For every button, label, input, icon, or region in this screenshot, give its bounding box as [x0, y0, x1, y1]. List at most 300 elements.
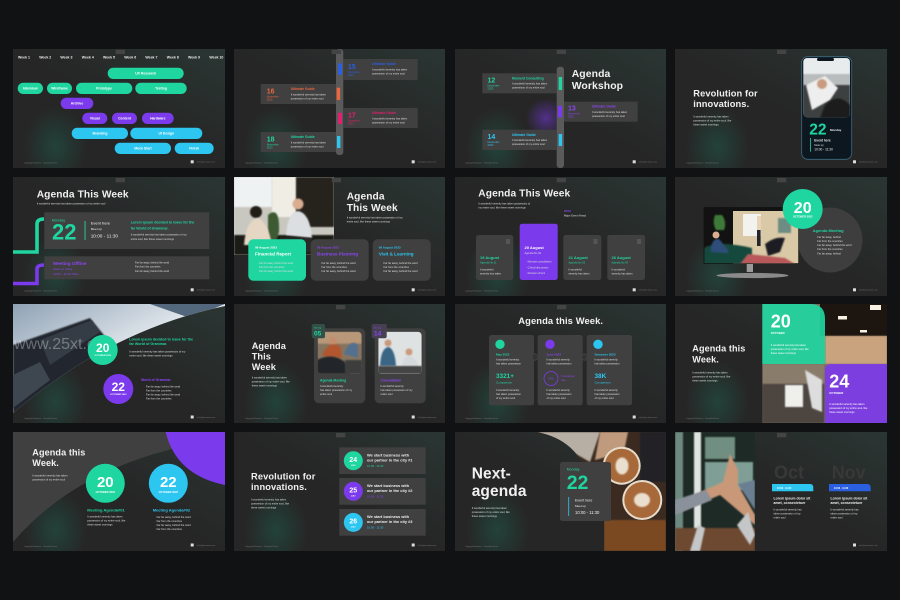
event text top: It wonderful serenity has taken possession of my — [129, 350, 186, 354]
event card meeting: Meet up today — [53, 267, 73, 271]
photo: coffee cups — [537, 432, 666, 551]
panel: revolution phone slide: info@yourname.com — [859, 162, 878, 164]
workshop card 12: November — [488, 84, 500, 88]
date circle — [783, 189, 823, 229]
gantt pills: Mock Start — [134, 147, 153, 151]
card: 21 august: serenity has taken — [568, 272, 590, 276]
photo: office meeting — [234, 177, 334, 255]
event card: 10:00 - 11:30 — [575, 510, 600, 515]
subtitle: It wonderful serenity has taken possession of my entire soul — [37, 202, 106, 206]
panel: vertical timeline slide: Copyright Business · Template Name — [245, 162, 279, 164]
oct text: taken possession of my — [774, 512, 801, 516]
event card — [560, 462, 611, 521]
card: 20 august highlighted — [520, 224, 558, 280]
body text: possession of my entire soul — [32, 478, 65, 482]
gantt pills: Visual — [90, 117, 100, 121]
panel: building photo slide — [13, 304, 225, 423]
oct text: amet, consectetuer — [774, 501, 806, 505]
timeline card 16 — [261, 84, 340, 104]
event card monday — [44, 212, 209, 249]
date block 24: OCTOBER — [829, 391, 843, 395]
panel: agenda this week circles slide: Copyright Business · Template Name — [24, 545, 58, 548]
body text: possession of my entire soul, like — [692, 374, 731, 378]
timeline card 16: 16 — [267, 88, 275, 96]
card: 21 august: It wonderful — [568, 268, 582, 272]
card 24: We start business with — [367, 452, 410, 458]
subtitle — [478, 201, 530, 209]
date badge 14: Meeting — [374, 326, 381, 330]
card: 21 august — [563, 235, 601, 280]
gantt pills: Archive — [71, 102, 83, 106]
agenda text 01: possession of my entire soul, like — [87, 518, 126, 522]
stat card september: It wonderful serenity — [594, 388, 618, 392]
agenda text 01 — [87, 508, 126, 526]
panel: next agenda coffee slide — [455, 432, 666, 551]
workshop card 13: 13 — [568, 106, 576, 112]
card: financial report: 08 August 2023 — [255, 246, 277, 250]
stat card may: has taken possession — [496, 362, 522, 366]
workshop card 13: possession of my entire soul — [592, 114, 625, 118]
body text — [251, 498, 290, 510]
event card meeting: Far far away, behind the word — [135, 260, 170, 264]
timeline card 17: Ultimate Guide — [372, 111, 396, 115]
stat card june: 65% — [548, 376, 554, 380]
workshop card 14: Ultimate Guide — [512, 133, 536, 137]
timeline card 15: November — [348, 70, 360, 74]
body text: these sweet mornings. — [693, 122, 720, 126]
heading: Agenda — [252, 341, 287, 351]
body text — [693, 114, 732, 126]
week header row: Week 8 — [167, 56, 179, 60]
agenda text 02 — [153, 508, 191, 531]
time bar blue — [829, 484, 871, 491]
agenda meeting list: Far from the countries — [817, 239, 843, 243]
card: visit and learning: Far far away, behind the word — [384, 261, 418, 265]
card: business planning: Far far away, behind the word — [322, 261, 356, 265]
week header row: Week 1 — [18, 56, 30, 60]
panel: building photo slide: info@yourname.com — [197, 417, 216, 419]
oct text: Lorem ipsum dolor sit — [774, 496, 811, 500]
time bar blue: 10:00 - 11:30 — [834, 487, 849, 490]
body text: It wonderful serenity has taken — [692, 370, 728, 374]
timeline card 17 — [338, 108, 418, 128]
date circle 20: OCTOBER 2023 — [95, 355, 112, 357]
stat card june: June 2023 — [546, 352, 561, 356]
body text: these sweet mornings — [692, 378, 718, 382]
card: consultation: entire soul — [380, 392, 393, 396]
heading — [32, 448, 85, 468]
panel: agenda this week photo cards slide: info@yourname.com — [418, 290, 437, 292]
stat card june: It wonderful serenity — [546, 358, 570, 362]
card 25: JULY — [351, 496, 356, 498]
date circle 20 — [88, 335, 118, 365]
card: consultation: Consultation — [380, 378, 401, 382]
card: 19 august: Agenda No 01 — [480, 260, 497, 264]
card 26: JULY — [351, 527, 356, 529]
agenda text 01: Meeting Agenda#01 — [87, 508, 125, 513]
stat card june — [538, 335, 583, 405]
agenda text 02: Meeting Agenda#02 — [153, 508, 191, 513]
stat card may — [489, 335, 534, 405]
heading: agenda — [472, 483, 527, 500]
body text — [252, 376, 290, 388]
event text bottom — [141, 378, 181, 400]
body text: possession of my entire soul, like — [252, 380, 290, 384]
heading: This Week — [347, 203, 398, 214]
date circle 22 — [149, 464, 188, 503]
card: agenda meeting — [312, 324, 365, 403]
heading: Agenda — [347, 191, 385, 202]
card: 26 august: 26 August — [612, 255, 631, 260]
oct text: entire soul — [774, 516, 786, 520]
event card monday: Lorem ipsum decided to leave for the — [131, 220, 194, 224]
event card monday: far World of Grammar. — [131, 226, 169, 230]
panel: agenda this week column cards slide: info@yourname.com — [639, 290, 658, 292]
agenda text 02: · Far from the countries — [155, 519, 183, 523]
gantt pills: Wireframe — [51, 87, 68, 91]
stat card june: of my entire soul — [546, 396, 566, 400]
date block 20: possession of my entire soul, like — [771, 347, 809, 351]
phone mockup: 10:00 - 11:30 — [814, 148, 833, 152]
card: 20 august highlighted: · Moment consultation — [526, 260, 552, 264]
date circle 22: 22 — [160, 474, 177, 491]
phone mockup: Monday — [830, 128, 842, 132]
event card meeting: Far from the countries — [135, 265, 161, 269]
agenda meeting list: Far far away, behind the word — [817, 243, 852, 247]
gantt pills: Content — [118, 117, 132, 121]
oct text — [774, 496, 811, 520]
card 24 — [339, 447, 426, 474]
card: financial report: Far far away, behind the word — [259, 261, 294, 265]
heading: Next- — [472, 466, 511, 482]
panel: agenda this week two photo cards slide: info@yourname.com — [418, 417, 437, 419]
body text — [472, 506, 510, 518]
panel: agenda this week column cards slide: Copyright Business · Template Name — [465, 290, 499, 292]
panel: revolution three cards slide — [234, 432, 445, 551]
stat card june: has taken possession — [546, 362, 572, 366]
stat card may: 3321+ — [496, 373, 514, 380]
time bar cyan — [772, 484, 813, 491]
event text bottom: World of Grammar — [141, 378, 171, 382]
date circle 20: 20 — [96, 341, 110, 355]
timeline card 16: It wonderful serenity has taken — [291, 92, 326, 96]
workshop card 12: 12 — [488, 78, 495, 84]
heading: Revolution for — [251, 472, 316, 482]
workshop card 12: Moment Consulting — [512, 76, 544, 80]
card: 19 august — [476, 235, 513, 280]
event card meeting — [44, 256, 209, 279]
body text: It wonderful serenity has taken — [251, 498, 287, 502]
card: agenda meeting: Agenda Meeting — [320, 378, 346, 382]
card 26: 10:00 - 11:30 — [367, 526, 384, 530]
panel: agenda this week schedule slide — [13, 177, 225, 296]
heading: Agenda — [572, 69, 611, 80]
timeline card 15 — [338, 59, 418, 80]
date circle 22 — [103, 374, 133, 404]
agenda meeting list: Far far away, behind — [817, 251, 841, 255]
timeline card 16: possession of my entire soul — [291, 96, 324, 100]
panel: agenda this week column cards slide — [455, 177, 666, 296]
stat card may: has taken possession — [496, 392, 522, 396]
card: visit and learning — [373, 239, 431, 281]
stat card september — [587, 335, 632, 405]
panel: agenda this week statistics slide: info@yourname.com — [639, 417, 658, 419]
phone mockup: Event here — [814, 139, 831, 143]
panel: agenda workshop slide — [455, 49, 666, 168]
connector dot — [532, 354, 538, 360]
photo: skyscraper — [13, 304, 225, 420]
card: agenda meeting: has taken possession of my — [320, 388, 353, 392]
workshop card 13: It wonderful serenity has taken — [592, 110, 628, 114]
card: business planning: Far far away, behind the word — [322, 269, 356, 273]
nov text: taken possession of my — [830, 512, 858, 516]
card: 19 august: 19 August — [480, 255, 500, 260]
heading: Agenda this — [692, 344, 745, 354]
week marker — [564, 209, 586, 218]
stat card september: Semester 2023 — [594, 352, 616, 356]
panel: weekly roadmap slide — [13, 49, 225, 168]
timeline card 15: 15 — [348, 64, 356, 71]
card: agenda meeting: It wonderful serenity — [320, 384, 344, 388]
date circle 22: OCTOBER 2023 — [110, 394, 127, 396]
panel: agenda this week two photo cards slide — [234, 304, 445, 423]
event text top — [129, 338, 193, 358]
teal connector — [13, 219, 44, 252]
timeline spine — [336, 49, 343, 155]
nov text: amet, consectetuer — [830, 501, 863, 505]
date circle: 20 — [794, 200, 812, 217]
panel: oct nov high five slide: info@yourname.com — [859, 545, 878, 547]
time bar cyan: 10:00 - 11:30 — [777, 487, 792, 490]
timeline card 17: November — [348, 118, 360, 122]
agenda text 02: · Far far away, behind the word — [155, 515, 191, 519]
date block 20: It wonderful serenity has taken — [771, 343, 806, 347]
event text top: Lorem ipsum decided to leave for the — [129, 338, 193, 342]
card: visit and learning: Visit & Learning — [379, 252, 414, 256]
card 25: We start business with — [367, 483, 410, 488]
event card monday: It wonderful serenity has taken possession of my — [131, 232, 187, 236]
date badge 05 — [312, 324, 325, 338]
date circle 20: 20 — [97, 474, 114, 491]
stat card june: It wonderful serenity — [546, 388, 570, 392]
card: 20 august highlighted: Agenda No 02 — [524, 251, 542, 255]
event card: Event here — [575, 498, 592, 502]
timeline card 17: It wonderful serenity has taken — [372, 116, 408, 120]
workshop card 12: It wonderful serenity has taken — [512, 82, 548, 86]
gantt pills: Finish — [189, 147, 199, 151]
event text top: far World of Grammar. — [129, 342, 167, 346]
workshop card 12 — [482, 73, 562, 93]
photo: office consultation — [378, 332, 422, 374]
card: 19 august: It wonderful — [480, 268, 494, 272]
card: 21 august: Agenda No 03 — [568, 260, 586, 264]
card: financial report — [248, 239, 306, 281]
heading: innovations. — [251, 482, 307, 492]
card: 19 august: serenity has taken — [480, 272, 502, 276]
panel: vertical timeline slide: info@yourname.com — [418, 162, 437, 164]
card: 21 august: 21 August — [568, 255, 588, 260]
card 24: our partner in the city #1 — [367, 458, 413, 462]
panel: agenda this week statistics slide: Copyright Business · Template Name — [465, 417, 499, 420]
stat card may: of my entire soul — [496, 396, 515, 400]
stat card june: Comparison — [561, 374, 576, 378]
workshop card 12: 2023 — [488, 86, 494, 90]
card 26: 26 — [349, 519, 357, 526]
week header row — [18, 56, 223, 60]
event text bottom: Far far away, behind the word — [146, 392, 181, 396]
week header row: Week 9 — [188, 56, 200, 60]
phone mockup: 22 — [809, 121, 827, 138]
event card monday: entire soul, like these sweet mornings — [131, 237, 175, 241]
month label nov: Nov — [832, 462, 866, 482]
date block 20 — [762, 304, 825, 364]
heading: innovations. — [693, 99, 749, 109]
card: business planning: 09 August 2023 — [317, 246, 339, 250]
stat card may: It wonderful serenity — [496, 358, 520, 362]
date circle: OCTOBER 2023 — [793, 214, 813, 218]
panel: agenda this week office photo slide — [675, 304, 887, 423]
timeline card 18: 18 — [267, 136, 275, 144]
connector dot — [581, 354, 588, 360]
body text — [692, 370, 731, 382]
stat card may: May 2023 — [496, 352, 510, 356]
week header row: Week 6 — [124, 56, 136, 60]
panel: agenda workshop slide: Copyright Business · Template Name — [465, 162, 499, 164]
agenda text 01: these sweet mornings — [87, 522, 113, 526]
gantt pills: UI Design — [158, 132, 174, 136]
heading: Week. — [32, 458, 59, 468]
gantt pills: Prototype — [96, 87, 112, 91]
workshop card 13: November — [568, 112, 580, 116]
week header row: Week 2 — [39, 56, 51, 60]
workshop card 12: possession of my entire soul — [512, 86, 545, 90]
date circle 20: OCTOBER 2023 — [96, 490, 116, 494]
card 24: JULY — [351, 465, 356, 467]
week marker: Major Event Ahead — [564, 214, 586, 218]
date block 24 — [825, 364, 887, 423]
heading — [347, 191, 398, 214]
card 24: 10:00 - 11:30 — [367, 464, 384, 468]
panel: revolution three cards slide: info@yourname.com — [418, 545, 437, 547]
timeline card 18 — [261, 132, 340, 152]
subtitle — [347, 216, 403, 224]
date block 20: these sweet mornings — [771, 351, 797, 355]
card: visit and learning: Far from the countries — [384, 265, 410, 269]
agenda text 02: · Far far away, behind the word — [155, 523, 191, 527]
timeline card 17: possession of my entire soul — [372, 120, 405, 124]
card 25: 25 — [349, 488, 357, 495]
card: 20 august highlighted: 20 August — [524, 245, 544, 250]
gantt pills: UX Research — [135, 72, 156, 76]
workshop card 13: Ultimate Guide — [592, 104, 616, 108]
heading — [251, 472, 316, 492]
date block 24: these sweet mornings — [829, 410, 855, 414]
week header row: Week 3 — [60, 56, 72, 60]
event text bottom: Far from the countries — [146, 388, 172, 392]
heading — [252, 341, 287, 372]
heading: Agenda This Week — [478, 189, 571, 200]
event card meeting: 10:00 - 11:30 office — [53, 272, 79, 276]
workshop card 14: November — [488, 140, 500, 144]
event text bottom: Far far away, behind the word — [146, 384, 181, 388]
panel: revolution phone slide — [675, 49, 887, 168]
panel: revolution three cards slide: Copyright Business · Template Name — [245, 545, 279, 548]
purple corner shape — [166, 432, 225, 485]
panel: agenda this week photo cards slide — [234, 177, 445, 296]
card: 20 august highlighted: · Decision check — [526, 271, 546, 275]
date badge 05: Meeting — [314, 326, 321, 330]
panel: agenda this week circles slide: info@yourname.com — [197, 545, 216, 547]
panel: agenda meeting monitor slide: Copyright Business · Template Name — [686, 290, 720, 292]
card: financial report: Far from the countries — [259, 265, 285, 269]
monitor photo — [704, 208, 799, 264]
date circle 20 — [86, 464, 125, 503]
event card meeting: Meeting Offline — [53, 261, 87, 266]
subtitle: my entire soul, like these sweet mornings — [478, 205, 526, 209]
body text: possession of my entire soul, like — [693, 118, 732, 122]
subtitle: entire soul, like these sweet mornings — [347, 220, 391, 224]
card 25: our partner in the city #2 — [367, 488, 413, 493]
nov text: It wonderful serenity has — [830, 508, 859, 512]
card: visit and learning: 09 August 2023 — [379, 246, 401, 250]
card: financial report: Far far away, behind the word — [259, 269, 294, 273]
date badge 14: 14 — [374, 330, 382, 338]
heading: This — [252, 352, 271, 362]
stat card september: of my entire soul — [594, 396, 614, 400]
event card meeting: Far far away, behind the word — [135, 269, 170, 273]
heading: Week. — [692, 354, 719, 364]
timeline card 16: Ultimate Guide — [291, 87, 315, 91]
nov text: entire soul — [830, 516, 843, 520]
event card monday: Event here — [91, 220, 111, 226]
agenda meeting list: Far far away, behind — [817, 235, 841, 239]
agenda meeting list — [813, 228, 852, 255]
event text bottom: Far from the countries — [146, 396, 172, 400]
workshop card 14: possession of my entire soul — [512, 142, 545, 146]
gantt pills: Interview — [23, 87, 38, 91]
card 26: our partner in the city #3 — [367, 519, 413, 524]
heading — [693, 89, 758, 109]
purple connector — [13, 265, 44, 284]
timeline card 17: 17 — [348, 112, 356, 120]
workshop card 13: 2023 — [568, 114, 574, 118]
heading — [472, 466, 527, 500]
date block 20: OCTOBER — [771, 331, 785, 335]
panel: agenda this week two photo cards slide: Copyright Business · Template Name — [245, 417, 279, 420]
timeline card 15: It wonderful serenity has taken — [372, 68, 408, 72]
body text: these sweet mornings — [251, 506, 277, 510]
subtitle: It wonderful serenity has taken possession of my — [347, 216, 403, 220]
event text top: entire soul, like these sweet mornings — [129, 354, 173, 358]
stat card june: has taken possession — [546, 392, 572, 396]
date block 24: It wonderful serenity has taken — [829, 402, 865, 406]
card: agenda meeting: entire soul — [320, 392, 332, 396]
card: 26 august: It wonderful — [612, 268, 625, 272]
nov text: Lorem ipsum dolor sit — [830, 496, 868, 500]
week header row: Week 5 — [103, 56, 115, 60]
heading: Week — [252, 362, 277, 372]
date circle 22: OCTOBER 2023 — [159, 490, 179, 494]
timeline card 17: 2023 — [348, 122, 354, 126]
week marker: 2023 — [564, 209, 571, 213]
panel: agenda meeting monitor slide — [675, 177, 887, 296]
photo: group discussion — [317, 332, 362, 374]
week header row: Week 7 — [145, 56, 157, 60]
card 24: 24 — [349, 457, 357, 464]
photo: high five — [675, 432, 755, 551]
phone mockup: Meet up — [814, 143, 824, 147]
gantt pills: Testing — [155, 87, 167, 91]
